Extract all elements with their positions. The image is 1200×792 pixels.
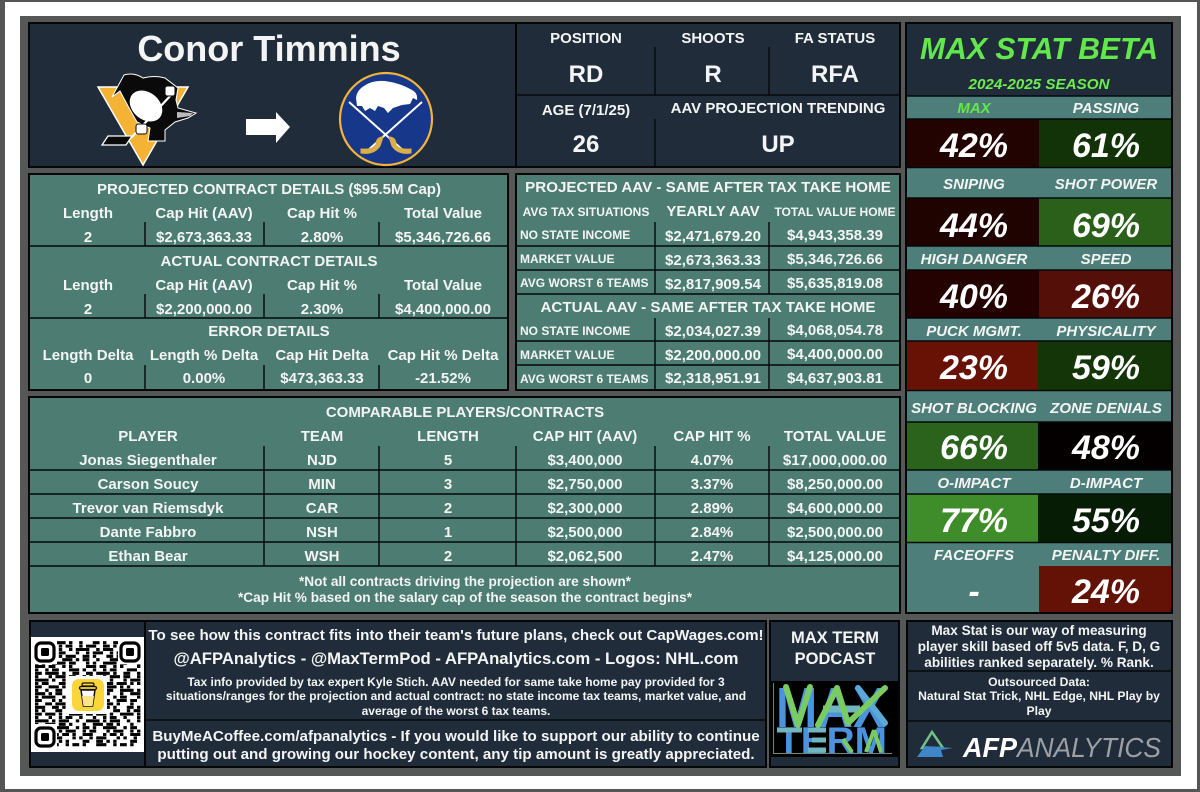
label row: position, shoots, FA status: POSITION	[550, 30, 622, 47]
row: actual no state income: $4,068,054.78	[787, 322, 883, 339]
stat: Faceoffs: FACEOFFS	[934, 547, 1014, 564]
column labels: comparables: TEAM	[301, 428, 343, 445]
heading: projected contract details: PROJECTED CONTRACT DETAILS ($95.5M Cap)	[97, 181, 441, 198]
column labels: projected: Total Value	[404, 205, 482, 222]
text: Max Stat description: abilities ranked separately. % Rank.	[924, 655, 1154, 670]
row: Ethan Bear	[108, 548, 883, 565]
heading: projected AAV after tax: PROJECTED AAV - SAME AFTER TAX TAKE HOME	[525, 179, 891, 196]
icon: Max Term logo: TERM	[777, 720, 887, 761]
value row: position, shoots, FA status: RFA	[811, 61, 859, 88]
row: Dante Fabbro: 2.84%	[691, 524, 733, 541]
row: actual market value: $4,400,000.00	[787, 346, 883, 363]
row: Dante Fabbro: NSH	[306, 524, 338, 541]
column labels: comparables: CAP HIT %	[673, 428, 751, 445]
text: social handles: @AFPAnalytics - @MaxTermPod - AFPAnalytics.com - Logos: NHL.com	[173, 649, 739, 668]
row: projected no state income	[520, 227, 883, 245]
QR modules	[35, 643, 140, 745]
icon: AFP Analytics logo	[917, 732, 1161, 763]
row: Carson Soucy	[98, 476, 883, 493]
values: actual: 2.30%	[301, 301, 343, 318]
column labels: comparables: LENGTH	[417, 428, 479, 445]
values: error: $473,363.33	[280, 370, 364, 387]
stat: Speed: SPEED	[1081, 251, 1132, 268]
row: projected market value	[520, 251, 883, 269]
row: Jonas Siegenthaler: NJD	[307, 452, 337, 469]
column labels: actual: Cap Hit (AAV)	[155, 277, 253, 294]
values: actual: $4,400,000.00	[395, 301, 491, 318]
panel: Max Stat note and branding	[907, 621, 1172, 767]
row: projected worst 6 teams: $2,817,909.54	[665, 276, 762, 293]
stat: Puck Management	[907, 323, 1038, 390]
column labels: tax table: TOTAL VALUE HOME	[774, 205, 896, 219]
panel: player attributes	[516, 23, 900, 167]
icon: Buffalo Sabres logo	[340, 73, 432, 165]
heading: actual AAV after tax: ACTUAL AAV - SAME AFTER TAX TAKE HOME	[540, 299, 876, 316]
stat: Penalty Differential: 24%	[1071, 573, 1140, 611]
stat: Physicality	[1038, 323, 1171, 390]
stat: Physicality: 59%	[1072, 349, 1140, 387]
text: tax note: situations/ranges for the projection and actual contract: no state income tax teams, market value, and	[166, 689, 746, 703]
text: tax note	[166, 675, 746, 718]
row: Trevor van Riemsdyk: Trevor van Riemsdyk	[73, 500, 224, 517]
row: Jonas Siegenthaler: $3,400,000	[547, 452, 623, 469]
row: projected no state income: NO STATE INCOME	[520, 228, 630, 242]
row: Ethan Bear: 2.47%	[691, 548, 733, 565]
stat: Shot Power: 69%	[1072, 207, 1140, 245]
panel: credits and notes	[145, 621, 766, 767]
row: Dante Fabbro: 1	[444, 524, 452, 541]
row: Ethan Bear: WSH	[304, 548, 340, 565]
stat: Shot Blocking	[907, 400, 1038, 470]
stat: Physicality: PHYSICALITY	[1056, 323, 1158, 340]
column labels: error: Cap Hit Delta	[275, 347, 369, 364]
row: actual worst 6 teams	[520, 370, 883, 387]
row: projected market value: $2,673,363.33	[665, 252, 761, 269]
row: Jonas Siegenthaler: $17,000,000.00	[783, 452, 887, 469]
row: projected worst 6 teams	[520, 275, 883, 293]
row: Dante Fabbro: $2,500,000.00	[787, 524, 883, 541]
column labels: comparables: PLAYER	[118, 428, 178, 445]
heading: actual contract details: ACTUAL CONTRACT DETAILS	[161, 253, 377, 270]
column labels: projected: Cap Hit (AAV)	[155, 205, 253, 222]
row: Carson Soucy: Carson Soucy	[98, 476, 199, 493]
row: Trevor van Riemsdyk: CAR	[306, 500, 338, 517]
text: Max Stat description	[918, 623, 1160, 670]
values: error: 0	[84, 370, 92, 387]
column labels: error: Length % Delta	[150, 347, 259, 364]
label row: age and AAV trend	[542, 100, 885, 119]
stat: D-Impact: D-IMPACT	[1070, 475, 1144, 492]
label row: position, shoots, FA status: FA STATUS	[795, 30, 875, 47]
values: error: -21.52%	[415, 370, 471, 387]
stat: Sniping	[907, 176, 1039, 246]
column labels: error	[43, 347, 499, 364]
stat: Passing	[1039, 100, 1171, 167]
stat: Zone Denials: 48%	[1071, 429, 1140, 467]
stat: Sniping: SNIPING	[943, 176, 1005, 193]
row: actual worst 6 teams: AVG WORST 6 TEAMS	[520, 372, 648, 386]
value row: age and AAV trend: UP	[761, 131, 795, 158]
icon: Max Term logo: MAX	[776, 676, 886, 740]
row: actual no state income	[520, 322, 883, 340]
stat: High Danger	[907, 251, 1039, 318]
column labels: actual: Total Value	[404, 277, 482, 294]
values: actual: 2	[84, 301, 92, 318]
title: player name: Conor Timmins	[137, 28, 401, 69]
stat: Shot Power	[1039, 176, 1171, 246]
row: Dante Fabbro: $2,500,000	[547, 524, 623, 541]
stat: Speed: 26%	[1071, 278, 1140, 316]
column labels: tax table	[523, 203, 896, 220]
row: projected no state income: $2,471,679.20	[665, 228, 761, 245]
row: Carson Soucy: $8,250,000.00	[787, 476, 883, 493]
heading: Max Stat Beta: 2024-2025 SEASON	[968, 76, 1111, 93]
row: actual no state income: NO STATE INCOME	[520, 324, 630, 338]
label row: position, shoots, FA status	[550, 30, 875, 47]
text: tax note: average of the worst 6 tax teams.	[362, 704, 550, 718]
stat: Penalty Differential: PENALTY DIFF.	[1052, 547, 1160, 564]
values: projected: $5,346,726.66	[395, 229, 491, 246]
column labels: comparables: TOTAL VALUE	[784, 428, 886, 445]
stat: Passing: 61%	[1072, 127, 1140, 165]
text: CapWages call to action: To see how this contract fits into their team's future plans, check out CapWages.com!	[148, 627, 764, 644]
value row: age and AAV trend: 26	[573, 131, 599, 158]
text: outsourced data: Play	[1027, 704, 1052, 718]
row: projected no state income: $4,943,358.39	[787, 227, 883, 244]
stat: Penalty Differential	[1039, 547, 1171, 612]
heading: podcast name: MAX TERM	[791, 629, 879, 647]
stat: Zone Denials	[1038, 400, 1171, 470]
column labels: actual	[63, 277, 482, 294]
panel: Max Term podcast	[770, 621, 899, 767]
heading: Max Stat Beta	[907, 24, 1171, 96]
panel: player header	[29, 23, 516, 167]
values: error	[84, 370, 471, 387]
values: projected	[84, 229, 491, 246]
stat: O-Impact	[907, 475, 1038, 542]
row: actual no state income: $2,034,027.39	[665, 323, 761, 340]
stat: Faceoffs	[934, 547, 1014, 611]
heading: comparable players: COMPARABLE PLAYERS/CONTRACTS	[326, 404, 604, 421]
column labels: projected	[63, 205, 482, 222]
row: Jonas Siegenthaler	[79, 452, 887, 469]
text: outsourced data: Outsourced Data:	[988, 675, 1090, 689]
values: projected: $2,673,363.33	[156, 229, 252, 246]
text: tip request	[152, 728, 760, 763]
text: tip request: putting out and growing our hockey content, any tip amount is greatly appreciated.	[157, 746, 755, 763]
text: outsourced data: Natural Stat Trick, NHL Edge, NHL Play by	[918, 689, 1160, 703]
row: Ethan Bear: $4,125,000.00	[787, 548, 883, 565]
text: Max Stat description: Max Stat is our way of measuring	[931, 623, 1147, 638]
stat: Puck Management: PUCK MGMT.	[926, 323, 1022, 340]
label row: age and AAV trend: AGE (7/1/25)	[542, 102, 630, 119]
stat: High Danger: HIGH DANGER	[921, 251, 1028, 268]
column labels: tax table: YEARLY AAV	[666, 203, 760, 220]
heading: error details: ERROR DETAILS	[208, 323, 330, 340]
stat: O-Impact: O-IMPACT	[937, 475, 1012, 492]
values: actual	[84, 301, 491, 318]
stat: Max: MAX	[957, 100, 992, 117]
row: Trevor van Riemsdyk	[73, 500, 883, 517]
stat: Faceoffs: -	[968, 573, 980, 611]
text: tip request: BuyMeACoffee.com/afpanalytics - If you would like to support our ability to continue	[152, 728, 760, 745]
icon: Pittsburgh Penguins logo	[98, 74, 196, 165]
values: actual: $2,200,000.00	[156, 301, 252, 318]
row: projected worst 6 teams: $5,635,819.08	[787, 275, 883, 292]
stat: High Danger: 40%	[939, 278, 1008, 316]
row: actual worst 6 teams: $4,637,903.81	[787, 370, 883, 387]
column labels: tax table: AVG TAX SITUATIONS	[523, 205, 649, 219]
footnotes: *Cap Hit % based on the salary cap of the season the contract begins*	[238, 590, 693, 605]
text: tax note: Tax info provided by tax expert Kyle Stich. AAV needed for same take home pay provided for 3	[187, 675, 725, 689]
row: Trevor van Riemsdyk: $4,600,000.00	[787, 500, 883, 517]
column labels: actual: Cap Hit %	[287, 277, 357, 294]
row: actual market value: $2,200,000.00	[665, 347, 761, 364]
values: projected: 2	[84, 229, 92, 246]
column labels: error: Cap Hit % Delta	[388, 347, 499, 364]
heading: podcast name: PODCAST	[795, 650, 875, 668]
stat: Speed	[1039, 251, 1171, 318]
panel: QR code	[30, 621, 145, 767]
column labels: projected: Length	[63, 205, 113, 222]
row: Carson Soucy: 3.37%	[691, 476, 733, 493]
row: Dante Fabbro	[100, 524, 883, 541]
stat: Shot Power: SHOT POWER	[1055, 176, 1157, 193]
icon: AFP Analytics logo: ANALYTICS	[1015, 732, 1161, 763]
row: projected market value: $5,346,726.66	[787, 251, 883, 268]
column labels: actual: Length	[63, 277, 113, 294]
row: projected market value: MARKET VALUE	[520, 252, 614, 266]
stat: Zone Denials: ZONE DENIALS	[1049, 400, 1162, 417]
row: Jonas Siegenthaler: 5	[444, 452, 452, 469]
row: Ethan Bear: 2	[444, 548, 452, 565]
stat: Sniping: 44%	[939, 207, 1008, 245]
text: outsourced data	[918, 675, 1160, 718]
value row: position, shoots, FA status: RD	[569, 61, 603, 88]
stat: Shot Blocking: 66%	[940, 429, 1008, 467]
icon: coffee cup	[72, 679, 104, 711]
stat: Max	[907, 100, 1039, 167]
row: Carson Soucy: 3	[444, 476, 452, 493]
stat: Shot Blocking: SHOT BLOCKING	[911, 400, 1037, 417]
row: Carson Soucy: $2,750,000	[547, 476, 623, 493]
arrow: team change	[246, 112, 290, 143]
panel: comparable contracts	[29, 397, 900, 613]
heading: podcast name	[791, 629, 879, 668]
stat: Puck Management: 23%	[939, 349, 1008, 387]
row: Jonas Siegenthaler: 4.07%	[691, 452, 733, 469]
stat: D-Impact	[1038, 475, 1171, 542]
footnotes	[238, 574, 693, 605]
row: actual worst 6 teams: $2,318,951.91	[665, 370, 761, 387]
QR finder patterns	[36, 643, 139, 746]
heading: Max Stat Beta: MAX STAT BETA	[920, 33, 1158, 66]
stat: Max: 42%	[939, 127, 1008, 165]
value row: age and AAV trend	[573, 131, 795, 158]
column labels: comparables	[118, 428, 886, 445]
row: actual market value: MARKET VALUE	[520, 348, 614, 362]
values: error: 0.00%	[183, 370, 225, 387]
text: Max Stat description: player skill based off 5v5 data. F, D, G	[918, 639, 1160, 654]
row: actual market value	[520, 346, 883, 364]
icon: AFP Analytics logo: AFP	[962, 732, 1017, 763]
row: Trevor van Riemsdyk: $2,300,000	[547, 500, 623, 517]
row: Trevor van Riemsdyk: 2.89%	[691, 500, 733, 517]
label row: age and AAV trend: AAV PROJECTION TRENDING	[671, 100, 885, 117]
panel: Max Stat Beta	[906, 23, 1172, 613]
column labels: comparables: CAP HIT (AAV)	[533, 428, 637, 445]
row: Dante Fabbro: Dante Fabbro	[100, 524, 196, 541]
column labels: projected: Cap Hit %	[287, 205, 357, 222]
value row: position, shoots, FA status: R	[704, 61, 722, 88]
row: Carson Soucy: MIN	[308, 476, 336, 493]
column labels: error: Length Delta	[43, 347, 134, 364]
row: Trevor van Riemsdyk: 2	[444, 500, 452, 517]
panel: contract details	[29, 174, 508, 390]
panel: after tax take home	[516, 174, 900, 390]
footnotes: *Not all contracts driving the projection are shown*	[299, 574, 632, 589]
values: projected: 2.80%	[301, 229, 343, 246]
stat: Passing: PASSING	[1073, 100, 1140, 117]
row: Ethan Bear: Ethan Bear	[108, 548, 188, 565]
value row: position, shoots, FA status	[569, 61, 859, 88]
stat: O-Impact: 77%	[940, 502, 1008, 540]
row: projected worst 6 teams: AVG WORST 6 TEAMS	[520, 276, 648, 290]
row: Ethan Bear: $2,062,500	[547, 548, 623, 565]
label row: position, shoots, FA status: SHOOTS	[681, 30, 745, 47]
stat: D-Impact: 55%	[1072, 502, 1140, 540]
row: Jonas Siegenthaler: Jonas Siegenthaler	[79, 452, 217, 469]
